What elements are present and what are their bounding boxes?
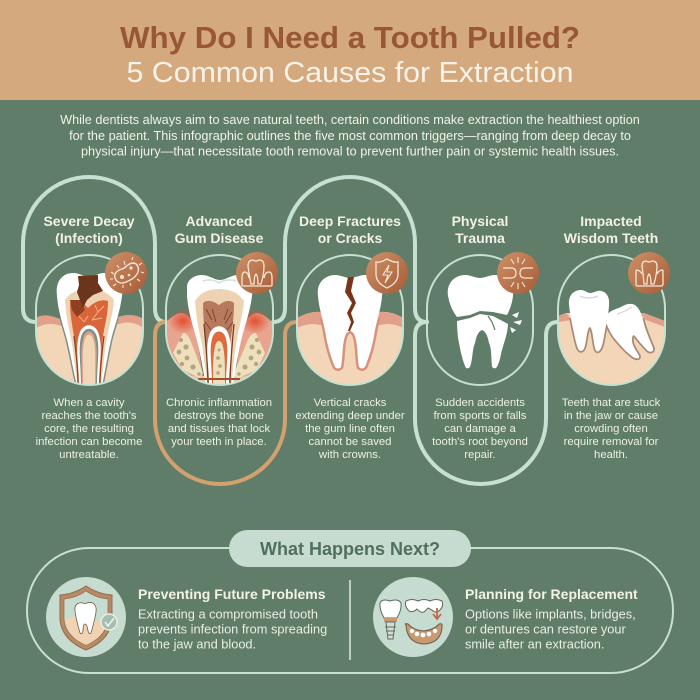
description: wisdom teeth: Teeth that are stuck: [562, 397, 661, 409]
text: planning for replacement: smile after an extraction.: [465, 636, 604, 652]
intro paragraph: While dentists always aim to save natural teeth, certain conditions make extraction the healthiest option: [60, 113, 640, 127]
description: fractures: [295, 397, 405, 461]
panel: gum disease: [160, 213, 278, 448]
title: Why Do I Need a Tooth Pulled?: [120, 20, 580, 55]
icon: replacement options: [373, 577, 453, 657]
icon: impact: [497, 252, 539, 294]
description: fractures: cannot be saved: [309, 436, 391, 448]
panel: wisdom teeth: [558, 213, 670, 461]
heading: fractures: or Cracks: [318, 230, 383, 246]
description: severe decay: core, the resulting: [44, 423, 134, 435]
description: trauma: Sudden accidents: [435, 397, 525, 409]
text: planning for replacement: or dentures can restore your: [465, 622, 626, 636]
description: gum disease: [166, 397, 272, 448]
heading: severe decay: [43, 213, 135, 246]
panel: fractures: [295, 213, 408, 461]
heading: gum disease: Advanced: [186, 213, 252, 229]
description: gum disease: destroys the bone: [174, 410, 264, 422]
header band: [0, 0, 700, 100]
illustration: impacted teeth: [558, 255, 665, 390]
description: severe decay: reaches the tooth's: [41, 410, 137, 422]
heading: fractures: [299, 213, 401, 246]
text: preventing future problems: Preventing Future Problems: [138, 586, 326, 602]
heading pill: [229, 530, 471, 567]
description: severe decay: When a cavity: [54, 397, 125, 409]
description: severe decay: [36, 397, 142, 461]
text: preventing future problems: prevents infection from spreading: [138, 622, 327, 636]
illustration: gum disease tooth: [160, 255, 278, 390]
icon: receding gum: [236, 252, 278, 294]
text: preventing future problems: Extracting a compromised tooth: [138, 606, 318, 622]
description: fractures: with crowns.: [318, 449, 381, 461]
heading: wisdom teeth: Impacted: [580, 213, 642, 229]
description: fractures: extending deep under: [295, 410, 405, 422]
text: preventing future problems: [138, 586, 327, 652]
heading: severe decay: (Infection): [55, 230, 123, 246]
heading: severe decay: Severe Decay: [43, 213, 135, 229]
icon: cracked shield: [366, 252, 408, 294]
description: gum disease: your teeth in place.: [171, 436, 267, 448]
description: fractures: Vertical cracks: [314, 397, 387, 409]
text: planning for replacement: Planning for Replacement: [465, 586, 638, 602]
intro paragraph: physical injury—that necessitate tooth removal to prevent further pain or systemic health issues.: [81, 144, 619, 158]
heading pill: What Happens Next?: [260, 539, 440, 559]
description: wisdom teeth: crowding often: [574, 423, 648, 435]
panel: what happens next: [27, 530, 673, 673]
description: gum disease: and tissues that lock: [168, 423, 271, 435]
heading: fractures: Deep Fractures: [299, 213, 401, 229]
heading: trauma: Trauma: [455, 230, 505, 246]
description: trauma: repair.: [464, 449, 496, 461]
heading: trauma: [452, 213, 508, 246]
description: fractures: the gum line often: [305, 423, 395, 435]
heading: gum disease: Gum Disease: [175, 230, 264, 246]
panel: severe decay: [30, 213, 150, 461]
heading: gum disease: [175, 213, 264, 246]
icon: impacted tooth: [628, 252, 670, 294]
text: planning for replacement: [465, 586, 638, 652]
description: wisdom teeth: require removal for: [564, 436, 659, 448]
connector: serpentine line: [23, 177, 558, 484]
description: trauma: from sports or falls: [434, 410, 527, 422]
text: preventing future problems: to the jaw and blood.: [138, 636, 256, 652]
description: trauma: [432, 397, 528, 461]
heading: wisdom teeth: Wisdom Teeth: [564, 230, 658, 246]
description: severe decay: untreatable.: [59, 449, 119, 461]
subtitle: 5 Common Causes for Extraction: [126, 57, 574, 89]
description: severe decay: infection can become: [36, 436, 142, 448]
illustration: cracked tooth: [297, 255, 403, 390]
description: trauma: tooth's root beyond: [432, 436, 528, 448]
text: planning for replacement: Options like implants, bridges,: [465, 606, 636, 622]
illustration: broken tooth: [427, 255, 533, 385]
description: wisdom teeth: health.: [594, 449, 628, 461]
description: gum disease: Chronic inflammation: [166, 397, 272, 409]
description: trauma: can damage a: [444, 423, 517, 435]
description: wisdom teeth: in the jaw or cause: [564, 410, 658, 422]
heading: trauma: Physical: [452, 213, 508, 229]
description: wisdom teeth: [562, 397, 661, 461]
illustration: decayed tooth: [35, 254, 144, 386]
panel: trauma: [427, 213, 539, 461]
icon: bacteria: [105, 252, 147, 294]
icon: shield with tooth: [46, 577, 126, 657]
heading: wisdom teeth: [564, 213, 658, 246]
intro paragraph: for the patient. This infographic outlines the five most common triggers—ranging from deep decay to: [69, 129, 631, 143]
intro paragraph: [60, 113, 640, 158]
